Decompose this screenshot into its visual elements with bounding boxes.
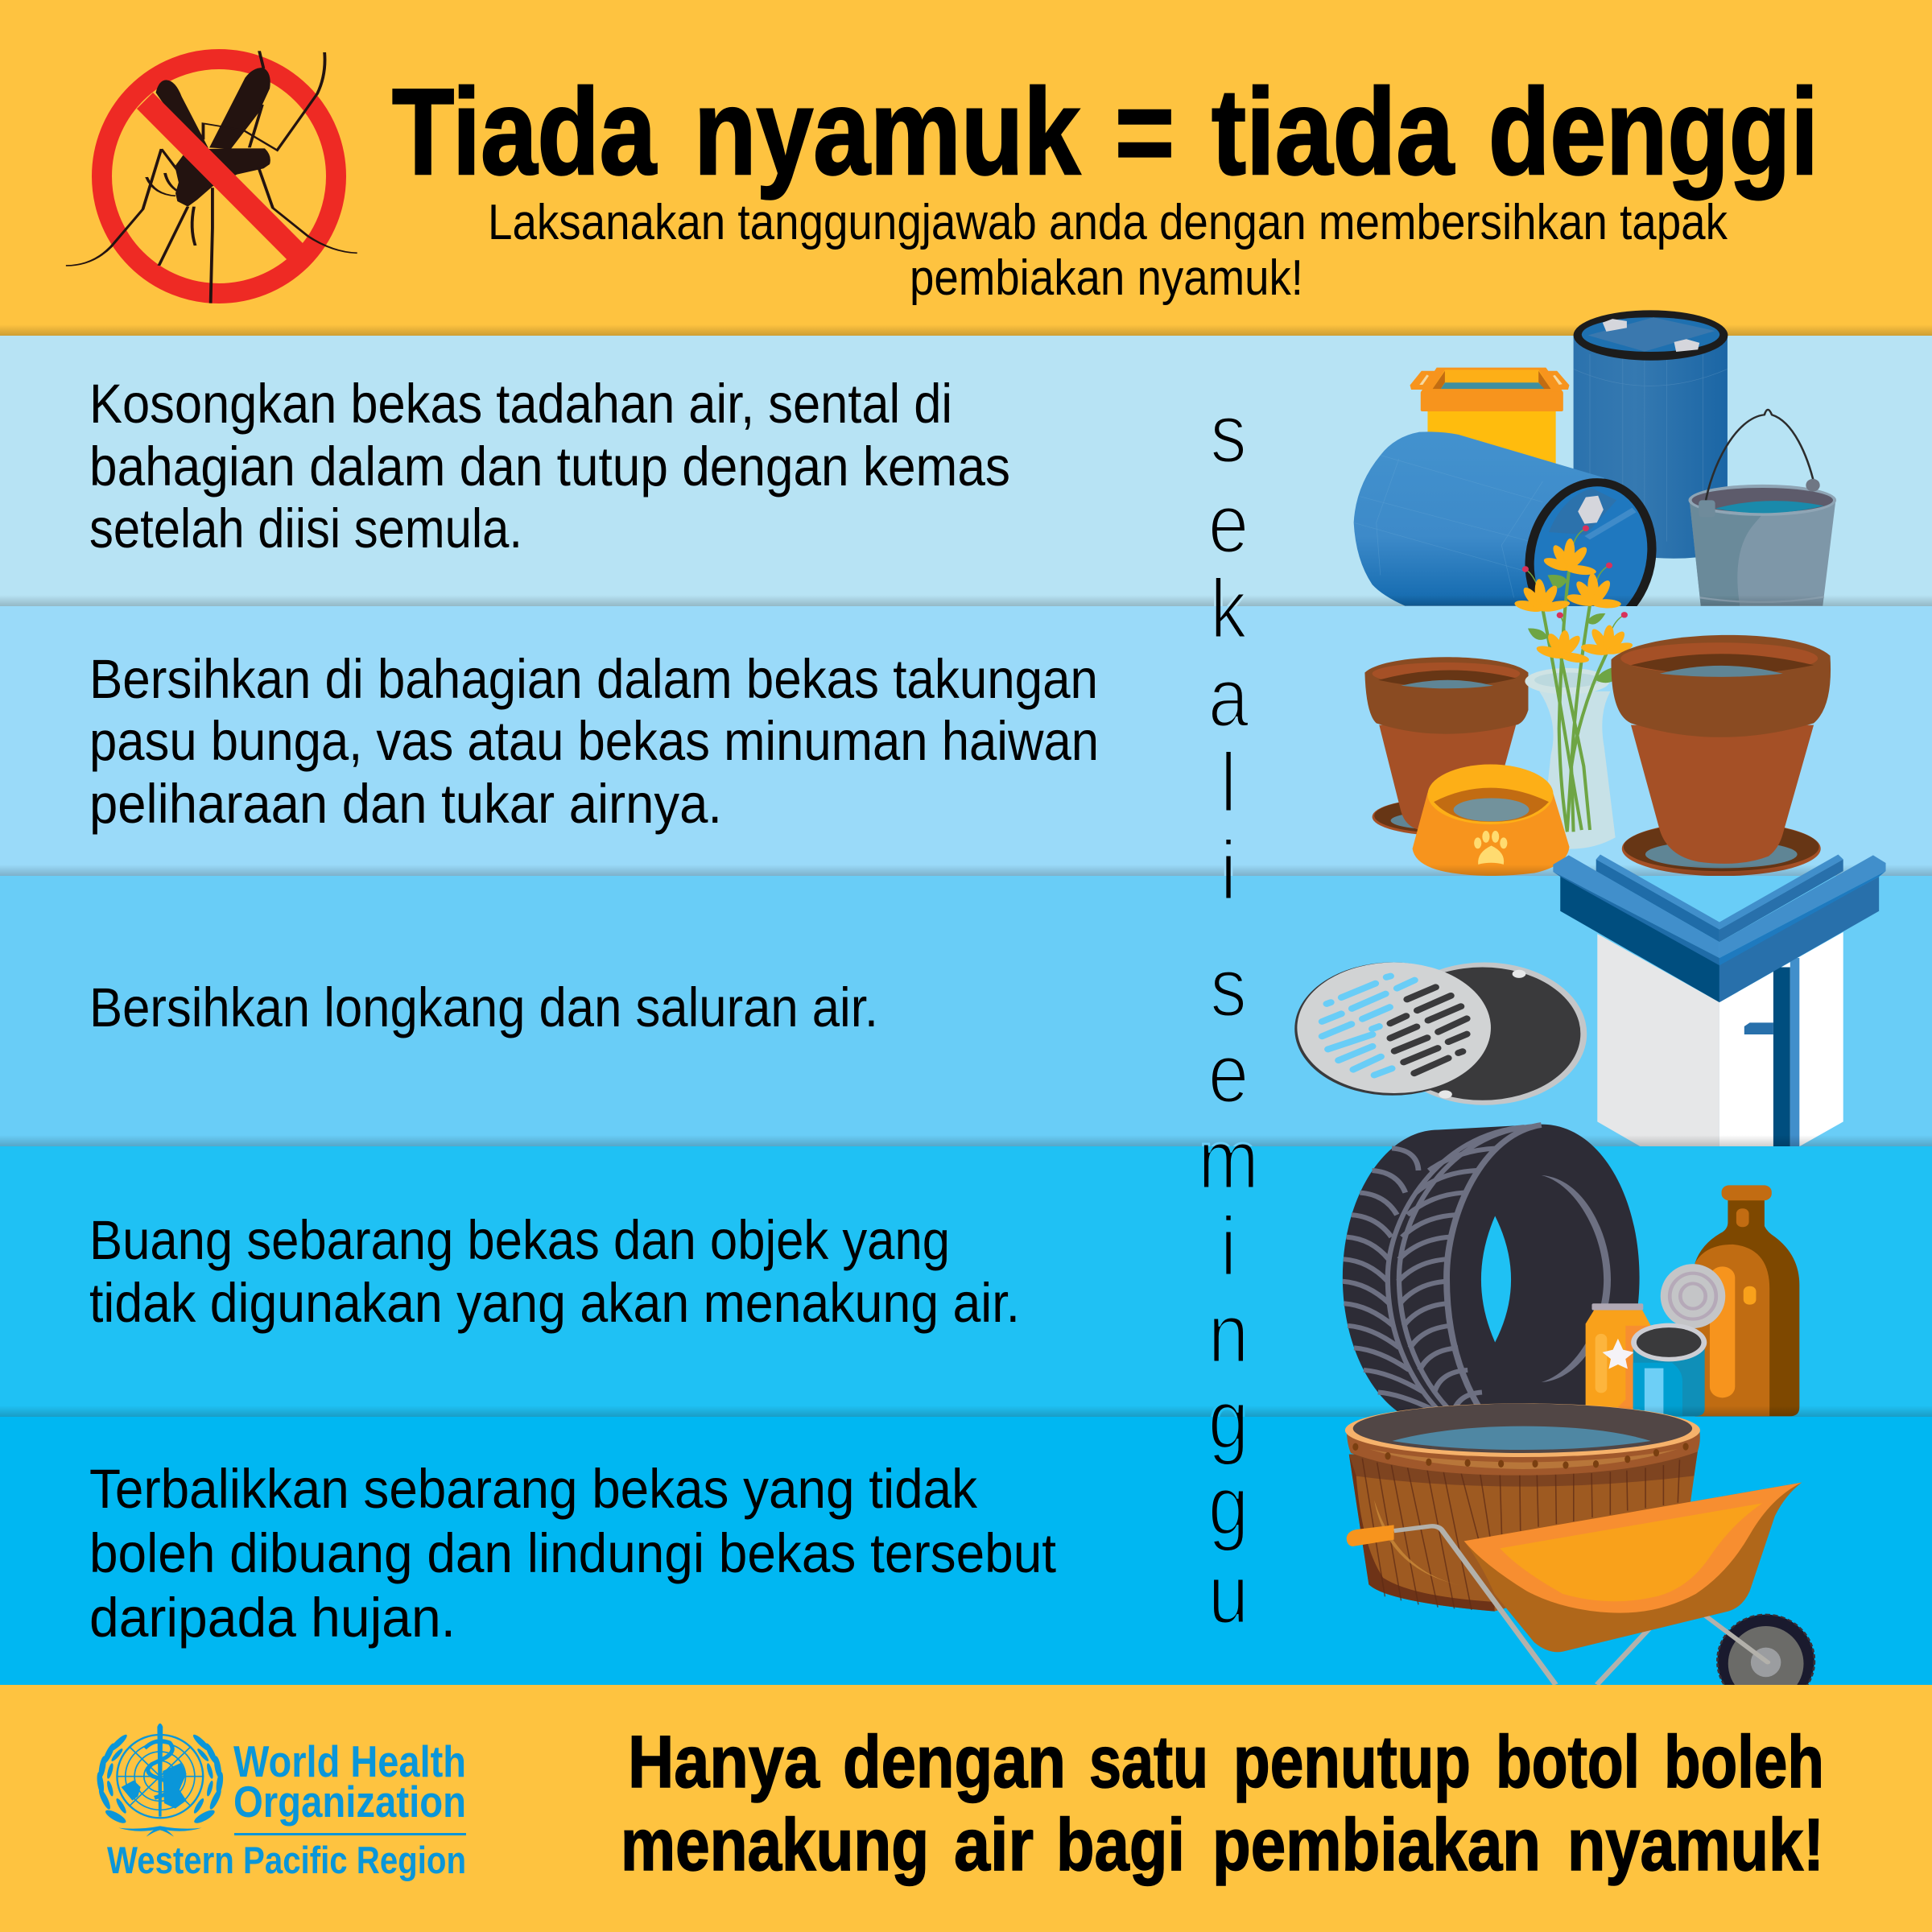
footer message: pembiakan <box>1212 1804 1541 1886</box>
icon: open tin lid <box>1661 1264 1725 1328</box>
panel: step 2 band <box>0 606 1932 876</box>
text: step 4: Buang sebarang bekas dan objek yang <box>89 1209 950 1271</box>
laurel left <box>96 1733 129 1826</box>
title: denggi <box>1488 64 1818 200</box>
slash <box>137 93 303 260</box>
ribbon <box>118 1826 201 1837</box>
footer message: menakung <box>621 1804 929 1886</box>
icon: brown bottle <box>1695 1185 1799 1416</box>
text: step 2: peliharaan dan tukar airnya. <box>89 773 722 835</box>
text: step 4: tidak digunakan yang akan menakung air. <box>89 1272 1020 1334</box>
footer message: boleh <box>1664 1721 1824 1803</box>
icon: upright blue barrel <box>1574 310 1728 559</box>
logo text: World Health Organization: World Health <box>233 1736 466 1786</box>
icon: wheelbarrow <box>1347 1483 1814 1707</box>
icon: paw print <box>1474 831 1507 865</box>
background: footer band <box>0 1685 1932 1932</box>
icon: flowers <box>1511 526 1634 832</box>
icon: globe <box>117 1735 203 1818</box>
vertical text: sekali seminggu: s <box>1210 386 1247 480</box>
footer message: air <box>954 1804 1034 1886</box>
footer message: botol <box>1496 1721 1640 1803</box>
title: nyamuk <box>694 64 1080 200</box>
vertical text: sekali seminggu: g <box>1208 1373 1249 1466</box>
logo text: World Health Organization: Western Pacific Region <box>107 1839 466 1881</box>
icon: no mosquito sign <box>66 51 357 303</box>
footer message: nyamuk! <box>1567 1804 1824 1886</box>
panel: step 1 band <box>0 336 1932 606</box>
icon: house corner with roof gutter <box>1553 854 1886 1146</box>
laurel right <box>192 1733 225 1826</box>
vertical text: sekali seminggu: e <box>1208 1026 1249 1120</box>
icon: small flower pot <box>1364 657 1528 836</box>
footer message: satu <box>1089 1721 1208 1803</box>
vertical text: sekali seminggu: i <box>1220 824 1236 917</box>
text: step 5 <box>89 1458 1056 1649</box>
vertical text: sekali seminggu: u <box>1208 1547 1249 1641</box>
vertical text: sekali seminggu: g <box>1208 1459 1249 1552</box>
subtitle <box>488 195 1728 306</box>
text: step 1: Kosongkan bekas tadahan air, sental di <box>89 373 952 435</box>
text: step 1 <box>89 373 1010 559</box>
title <box>392 64 1818 200</box>
text: step 1: bahagian dalam dan tutup dengan kemas <box>89 436 1010 497</box>
icon: wooden tub <box>1345 1403 1700 1612</box>
vertical text: sekali seminggu: e <box>1208 477 1249 570</box>
text: step 2: Bersihkan di bahagian dalam bekas takungan <box>89 648 1098 710</box>
icon: pet bowl <box>1413 765 1569 876</box>
icon: blue tin can <box>1631 1323 1707 1416</box>
footer message: Hanya <box>628 1721 820 1803</box>
text: step 5: boleh dibuang dan lindungi bekas tersebut <box>89 1522 1056 1584</box>
icon: tyre <box>1343 1125 1640 1431</box>
logo text: World Health Organization: Organization <box>233 1777 466 1827</box>
icon: wheel <box>1716 1613 1816 1685</box>
title: = <box>1115 64 1174 200</box>
vertical text: sekali seminggu: i <box>1220 1199 1236 1293</box>
text: step 3: Bersihkan longkang dan saluran air. <box>89 976 878 1038</box>
title: tiada <box>1212 64 1455 200</box>
text: step 2: pasu bunga, vas atau bekas minuman haiwan <box>89 710 1099 772</box>
icon: drain cover <box>1294 963 1587 1105</box>
footer message: penutup <box>1233 1721 1471 1803</box>
icon: mosquito silhouette <box>66 51 357 303</box>
continents <box>122 1763 187 1809</box>
text: step 5: daripada hujan. <box>89 1587 456 1649</box>
illustration: step 1 water containers <box>1354 310 1837 606</box>
text: step 5: Terbalikkan sebarang bekas yang tidak <box>89 1458 977 1520</box>
text: step 2 <box>89 648 1099 835</box>
illustration: step 2 pots, vase and pet bowl <box>1364 526 1831 876</box>
text: step 1: setelah diisi semula. <box>89 497 522 559</box>
text: step 4 <box>89 1209 1020 1334</box>
vertical text: sekali seminggu: m <box>1198 1113 1259 1206</box>
vertical text: sekali seminggu <box>1198 386 1259 1641</box>
icon: metal bucket <box>1688 410 1836 606</box>
logo: World Health Organization emblem <box>96 1724 225 1837</box>
illustration: step 4 tyre, bottle and cans <box>1343 1125 1799 1431</box>
footer message: dengan <box>843 1721 1066 1803</box>
vertical text: sekali seminggu: n <box>1208 1286 1249 1380</box>
footer message <box>621 1721 1824 1886</box>
vertical text: sekali seminggu: s <box>1210 940 1247 1034</box>
icon: drink can <box>1586 1303 1651 1416</box>
title: Tiada <box>392 64 657 200</box>
subtitle: Laksanakan tanggungjawab anda dengan membersihkan tapak <box>488 195 1728 250</box>
vertical text: sekali seminggu: l <box>1220 736 1236 829</box>
panel: step 3 band <box>0 876 1932 1146</box>
illustration: step 3 gutter and drain <box>1294 854 1886 1146</box>
icon: staff and serpent <box>145 1724 172 1817</box>
illustration: step 5 basket and wheelbarrow <box>1345 1403 1814 1707</box>
vertical text: sekali seminggu: k <box>1210 562 1247 655</box>
panel: step 5 band <box>0 1417 1932 1685</box>
icon: glass vase <box>1525 668 1616 849</box>
panel: step 4 band <box>0 1146 1932 1417</box>
logo text: World Health Organization <box>107 1736 466 1881</box>
background: header band <box>0 0 1932 336</box>
vertical text: sekali seminggu: a <box>1208 650 1249 744</box>
icon: lying blue barrel <box>1354 431 1657 606</box>
icon: large flower pot <box>1611 635 1831 876</box>
footer message: bagi <box>1056 1804 1185 1886</box>
icon: yellow bin <box>1410 367 1570 464</box>
subtitle: pembiakan nyamuk! <box>910 250 1303 306</box>
